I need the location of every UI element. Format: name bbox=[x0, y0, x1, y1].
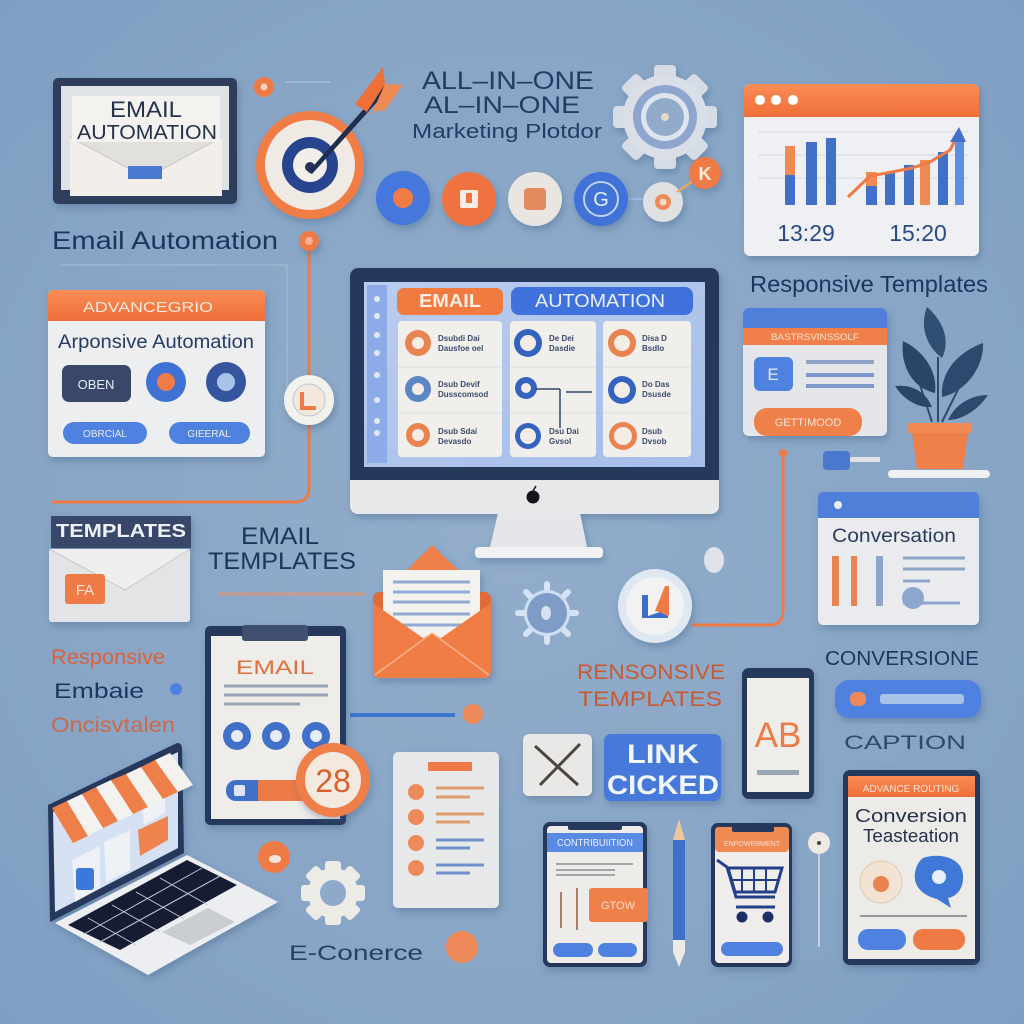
small badge bbox=[446, 931, 478, 963]
icon: large gear bbox=[301, 861, 365, 925]
monitor card labels: Dasdie bbox=[549, 344, 576, 353]
heading: responsive templates: Responsive Templates bbox=[750, 271, 988, 297]
heading: email templates bbox=[208, 523, 356, 575]
icon: connector badge bbox=[618, 569, 692, 643]
panel: phone ab: AB bbox=[755, 716, 801, 755]
monitor card labels: Dusscomsod bbox=[438, 390, 488, 399]
button: conversion pill bbox=[835, 680, 981, 718]
keyboard bbox=[68, 860, 237, 950]
panel: chart window bbox=[744, 84, 979, 256]
monitor card labels: Dausfoe oel bbox=[438, 344, 483, 353]
heading: email automation card text: EMAIL bbox=[110, 97, 182, 122]
label: email automation: Email Automation bbox=[52, 227, 278, 255]
badge: 28: 28 bbox=[315, 763, 351, 799]
title: ALL–IN–ONE bbox=[422, 67, 594, 95]
text block: left labels: Responsive bbox=[51, 646, 165, 669]
monitor cards bbox=[398, 321, 691, 457]
heading: rensonsive templates: TEMPLATES bbox=[578, 688, 722, 711]
heading: email templates: EMAIL bbox=[241, 523, 319, 550]
panel: central monitor: EMAIL bbox=[419, 291, 481, 311]
text block: left labels: Embaie bbox=[54, 680, 144, 703]
monitor card labels: Dsub Sdai bbox=[438, 427, 477, 436]
panel: responsive template card bbox=[743, 308, 887, 436]
bar chart bbox=[785, 127, 966, 205]
panel: phone cart: ENPOWERMENT bbox=[724, 841, 781, 848]
panel: responsive template card: GETTIMOOD bbox=[775, 417, 841, 429]
panel: central monitor bbox=[350, 268, 719, 558]
small clip icon bbox=[704, 547, 724, 573]
small badge bbox=[254, 77, 274, 97]
panel: clipboard: EMAIL bbox=[236, 658, 314, 679]
monitor card labels: Dsub Devif bbox=[438, 380, 480, 389]
panel: phone conversion: Teasteation bbox=[863, 826, 959, 846]
panel: phone form bbox=[543, 822, 648, 967]
monitor card labels bbox=[438, 334, 671, 446]
icon row: circular icons: K bbox=[698, 164, 712, 184]
title: Marketing Plotdor bbox=[412, 121, 602, 143]
badge: link clicked: CICKED bbox=[607, 770, 719, 800]
label: e-commerce: E-Conerce bbox=[289, 942, 423, 965]
panel: list document bbox=[393, 752, 499, 908]
badge: templates label: TEMPLATES bbox=[56, 521, 186, 541]
panel: automation card: OBRCIAL bbox=[83, 429, 127, 440]
title: AL–IN–ONE bbox=[424, 92, 580, 119]
monitor card labels: Bsdlo bbox=[642, 344, 664, 353]
panel: phone conversion bbox=[843, 770, 980, 965]
monitor card labels: Gvsol bbox=[549, 437, 571, 446]
panel: conversation card: Conversation bbox=[832, 526, 956, 547]
storefront awning bbox=[52, 753, 193, 843]
panel: phone conversion: ADVANCE ROUTING bbox=[863, 784, 959, 795]
heading: rensonsive templates bbox=[577, 661, 725, 711]
panel: phone form: GTOW bbox=[601, 900, 636, 912]
icon: templates envelope bbox=[49, 549, 190, 622]
panel: phone conversion: Conversion bbox=[855, 806, 967, 826]
icon: small gear bbox=[518, 584, 576, 642]
label: caption: CAPTION bbox=[844, 733, 966, 754]
badge: link clicked bbox=[604, 734, 721, 801]
panel: responsive template card: BASTRSVINSSOLF bbox=[771, 332, 860, 342]
monitor card labels: De Dei bbox=[549, 334, 574, 343]
icon: x card bbox=[523, 734, 592, 796]
icon: shopping cart bbox=[717, 860, 782, 907]
title bbox=[412, 67, 602, 143]
panel: automation card: Arponsive Automation bbox=[58, 332, 254, 353]
small connector badge bbox=[463, 704, 483, 724]
panel: phone cart bbox=[711, 823, 792, 967]
monitor card labels: Devasdo bbox=[438, 437, 471, 446]
icon: templates envelope: FA bbox=[76, 582, 94, 599]
icon row: circular icons bbox=[376, 157, 721, 226]
monitor card labels: Do Das bbox=[642, 380, 670, 389]
heading: rensonsive templates: RENSONSIVE bbox=[577, 661, 725, 684]
connector lines bbox=[52, 82, 783, 715]
monitor card labels: Disa D bbox=[642, 334, 667, 343]
icon: potted plant bbox=[888, 307, 990, 478]
badge: link clicked: LINK bbox=[627, 739, 700, 769]
apple-like logo bbox=[526, 486, 540, 504]
panel: responsive template card: E bbox=[767, 365, 779, 384]
panel: conversation card bbox=[818, 492, 979, 625]
badge: 28 bbox=[296, 743, 370, 817]
panel: clipboard bbox=[205, 625, 346, 825]
monitor card labels: Dsusde bbox=[642, 390, 671, 399]
panel: email automation envelope card bbox=[53, 78, 237, 204]
panel: phone form: CONTRIBUIITION bbox=[557, 838, 633, 849]
text block: left labels bbox=[51, 646, 175, 737]
panel: automation card: GIEERAL bbox=[187, 429, 231, 440]
connector dot and tag bbox=[779, 449, 880, 470]
icon: open envelope with letter bbox=[373, 545, 491, 678]
monitor tabs bbox=[397, 288, 503, 315]
small pin bbox=[808, 832, 830, 947]
monitor card labels: Dsubdi Dai bbox=[438, 334, 480, 343]
connector badges bbox=[284, 231, 334, 425]
monitor card labels: Dvsob bbox=[642, 437, 667, 446]
monitor card labels: Dsu Dai bbox=[549, 427, 579, 436]
panel: automation card: ADVANCEGRIO bbox=[83, 299, 213, 316]
panel: phone ab bbox=[742, 668, 814, 799]
icon: pencil bbox=[673, 819, 685, 967]
panel: email automation envelope card: AUTOMATION bbox=[77, 122, 217, 144]
icon: gear bbox=[613, 65, 717, 169]
icon: target with arrow bbox=[256, 67, 403, 219]
panel: chart window: 15:20 bbox=[889, 220, 947, 246]
panel: automation card bbox=[48, 290, 265, 457]
badge: templates label bbox=[51, 516, 191, 548]
monitor card labels: Dsub bbox=[642, 427, 662, 436]
panel: central monitor: AUTOMATION bbox=[535, 291, 665, 311]
text block: left labels: Oncisvtalen bbox=[51, 714, 175, 737]
heading: email templates: TEMPLATES bbox=[208, 548, 356, 575]
small badge bbox=[258, 841, 290, 873]
chart time labels: 13:29 bbox=[777, 220, 835, 246]
label: conversione: CONVERSIONE bbox=[825, 648, 979, 670]
panel: automation card: OBEN bbox=[78, 377, 114, 392]
icon row: circular icons: G bbox=[593, 189, 609, 211]
panel: laptop with storefront bbox=[48, 743, 278, 975]
small drop icon bbox=[170, 683, 182, 695]
